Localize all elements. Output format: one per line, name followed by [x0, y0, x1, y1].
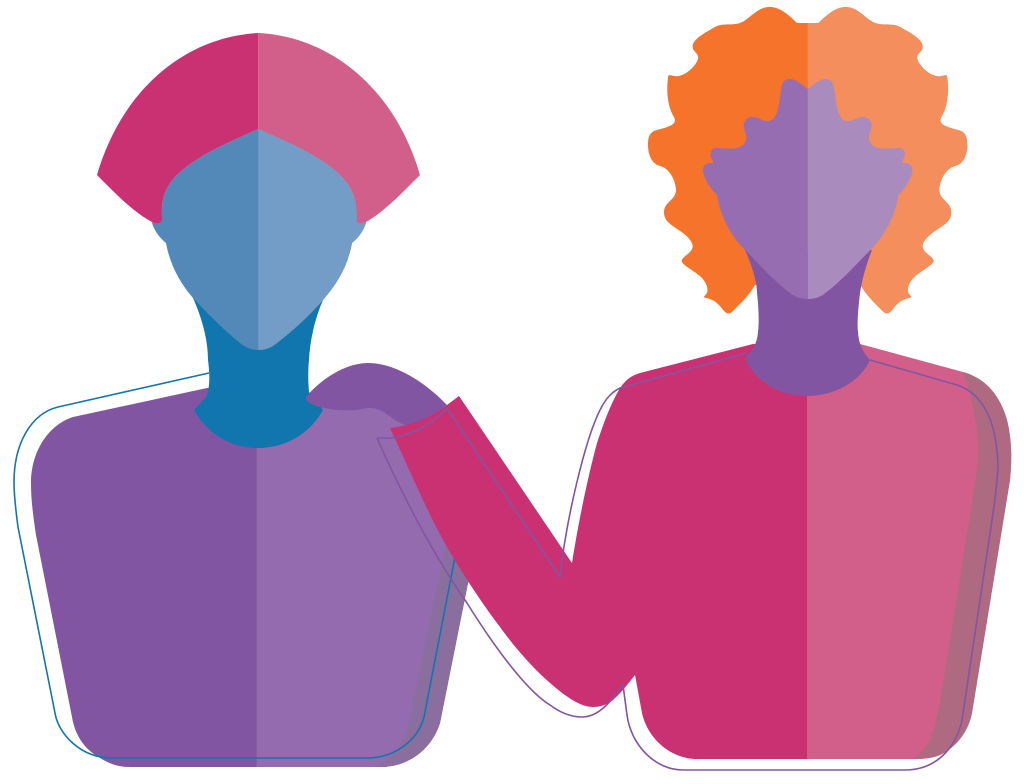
left neck [193, 298, 323, 448]
hand on shoulder [306, 363, 447, 428]
right neck [745, 250, 872, 396]
left figure [14, 33, 470, 767]
right outline [377, 353, 998, 770]
left hat [97, 33, 420, 223]
right figure [390, 7, 1011, 759]
left torso [31, 388, 470, 767]
left outline [14, 373, 455, 758]
torso shadow [373, 540, 470, 767]
hair [648, 7, 967, 314]
left head [152, 129, 366, 350]
right face [703, 79, 912, 299]
right torso and arm [390, 344, 1011, 759]
right torso shadow [913, 372, 1011, 759]
